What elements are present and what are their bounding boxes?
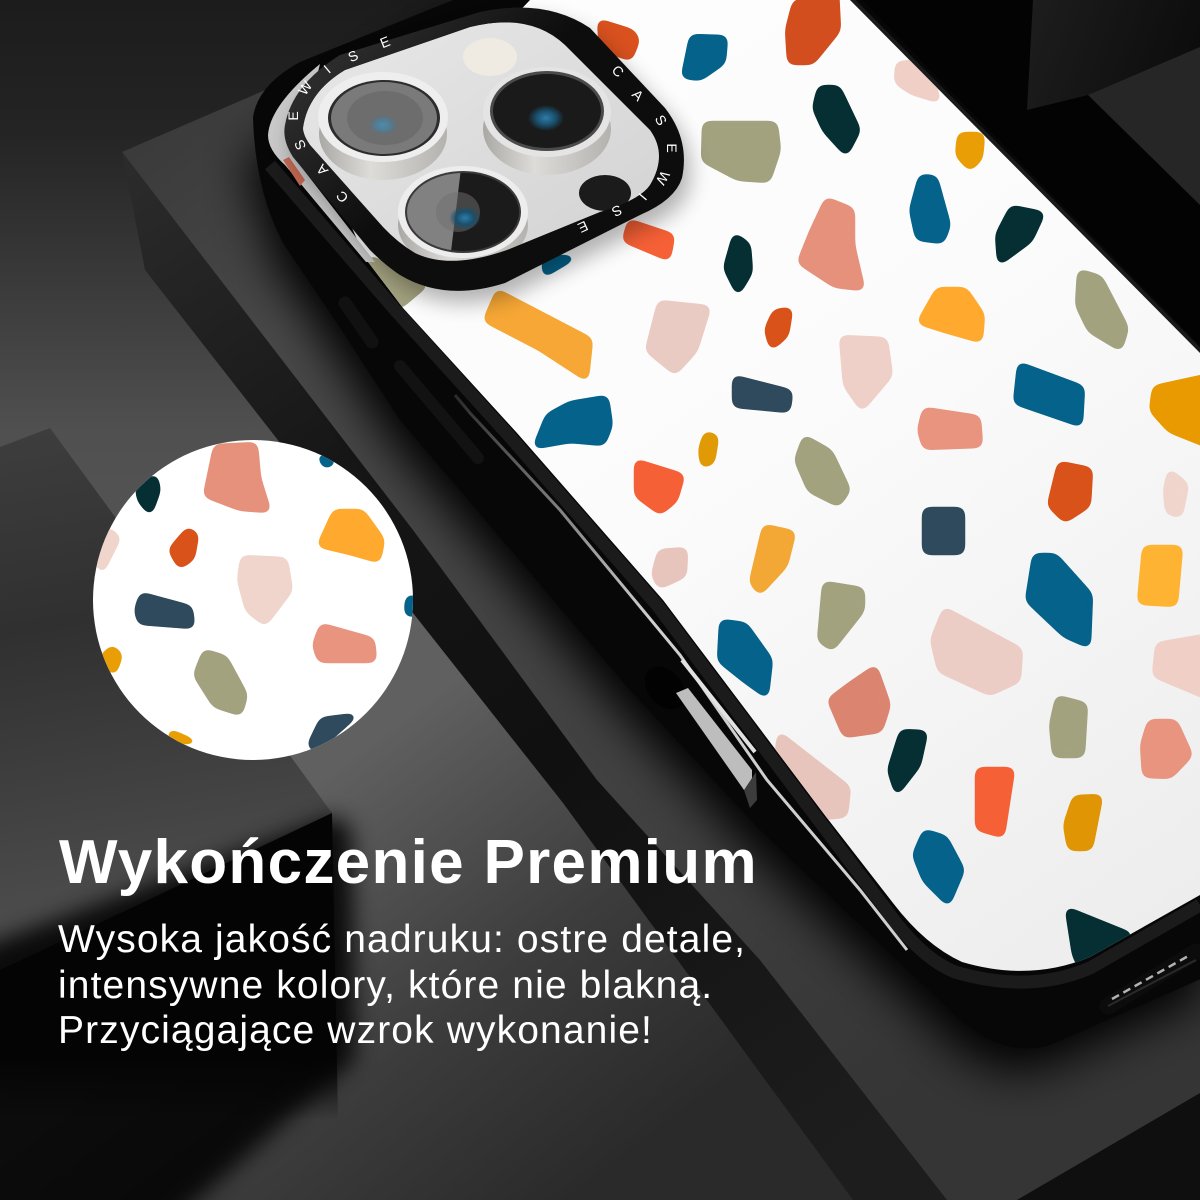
body text: Przyciągające wzrok wykonanie! (58, 1009, 653, 1052)
CASEWISE ring lettering: E (575, 218, 591, 236)
CASEWISE ring lettering: I (320, 62, 334, 76)
magnified pattern circle (92, 440, 416, 760)
body text: intensywne kolory, które nie blakną. (58, 964, 713, 1006)
phone (253, 0, 1200, 1007)
camera ring (284, 8, 684, 291)
CASEWISE ring lettering: S (345, 47, 361, 65)
flash (463, 38, 517, 76)
upper right block (1027, 0, 1200, 205)
terrazzo pattern (370, 0, 1200, 975)
CASEWISE ring lettering: A (629, 86, 647, 104)
floor (0, 613, 853, 1200)
lens: left camera (318, 72, 448, 180)
island shadow (290, 20, 690, 303)
phone shadow (245, 22, 1200, 1070)
body text: Wysoka jakość nadruku: ostre detale, (58, 918, 746, 961)
CASEWISE ring lettering: C (609, 62, 627, 80)
rim highlight (455, 395, 907, 950)
pedestal side face (122, 152, 947, 1200)
CASEWISE ring lettering (285, 33, 680, 236)
title: Wykończenie Premium (59, 828, 758, 897)
camera glass window (303, 22, 659, 261)
CASEWISE ring lettering: A (312, 161, 331, 179)
salmon sliver (283, 157, 305, 186)
white screen (350, 0, 1200, 971)
CASEWISE ring lettering: S (291, 137, 309, 153)
upper right black backdrop (840, 0, 1200, 370)
side button (400, 366, 478, 458)
lens: bottom camera (398, 166, 528, 261)
pedestal lower right dark corner (1017, 1093, 1200, 1200)
case rim dark line (850, 0, 1200, 353)
CASEWISE ring lettering: C (333, 188, 351, 206)
lens: right camera (483, 67, 611, 175)
camera island (284, 8, 684, 291)
CASEWISE ring lettering: E (285, 111, 301, 121)
CASEWISE ring lettering: I (636, 190, 650, 204)
CASEWISE ring lettering: E (664, 143, 680, 153)
lower left block (0, 428, 355, 1200)
CASEWISE ring lettering: S (652, 112, 670, 128)
CASEWISE ring lettering: S (609, 202, 625, 220)
case body (253, 0, 1200, 1048)
CASEWISE ring lettering: W (652, 168, 673, 188)
CASEWISE ring lettering: W (295, 77, 316, 98)
bottom port (1108, 952, 1196, 1006)
mic hole (345, 303, 372, 342)
screen sliver around camera ring (268, 64, 375, 262)
CASEWISE ring lettering: E (378, 33, 392, 51)
body text (58, 918, 746, 1052)
lidar (579, 175, 631, 211)
silver button (637, 659, 757, 808)
case rim band (270, 165, 1200, 982)
